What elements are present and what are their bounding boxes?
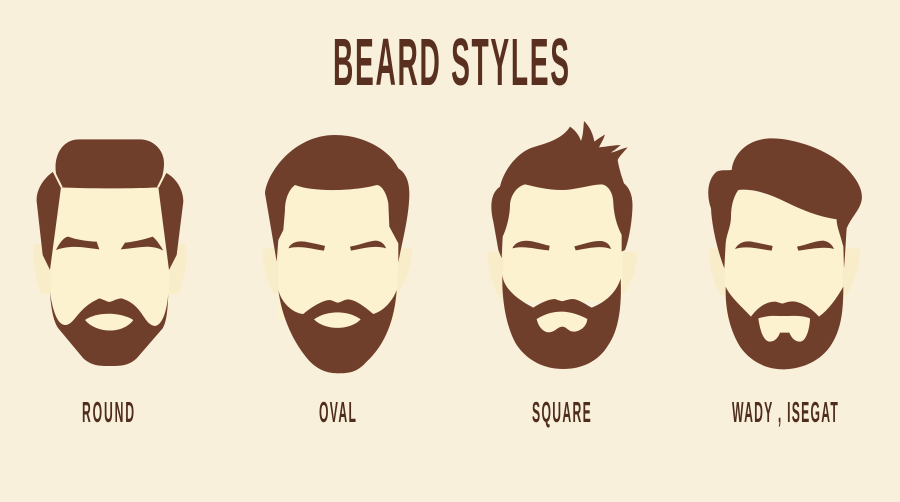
ears <box>709 248 860 295</box>
face: wady isegat beard <box>708 138 862 369</box>
hair separation lines <box>54 171 166 187</box>
side hair <box>37 172 183 270</box>
beard <box>726 287 843 369</box>
mouth <box>314 312 361 328</box>
face: round beard <box>33 139 187 366</box>
face skin <box>725 187 843 320</box>
beard <box>50 292 168 366</box>
eyebrows <box>56 237 163 251</box>
label: oval: OVAL <box>319 396 356 429</box>
label: round: ROUND <box>82 396 134 429</box>
title: BEARD STYLES <box>333 24 569 99</box>
mouth and chin patch <box>758 316 810 342</box>
ears <box>488 252 637 298</box>
face: square beard <box>488 121 637 369</box>
swept hair <box>708 138 862 268</box>
face skin <box>50 185 170 357</box>
eyebrows <box>288 241 386 251</box>
ears <box>33 244 187 294</box>
beard <box>502 275 621 369</box>
hair <box>265 135 409 263</box>
face skin <box>503 183 623 302</box>
label: wady, isegat: WADY , ISEGAT <box>732 396 838 429</box>
ears <box>263 248 412 293</box>
eyebrows <box>512 241 611 250</box>
mouth <box>85 314 133 330</box>
top hair <box>56 139 164 188</box>
mouth and chin patch <box>537 312 587 332</box>
beard <box>278 290 397 373</box>
label: square: SQUARE <box>532 396 591 429</box>
face skin <box>278 185 398 320</box>
face: oval beard <box>263 135 412 373</box>
eyebrows <box>735 241 834 251</box>
spiky hair <box>491 121 633 258</box>
